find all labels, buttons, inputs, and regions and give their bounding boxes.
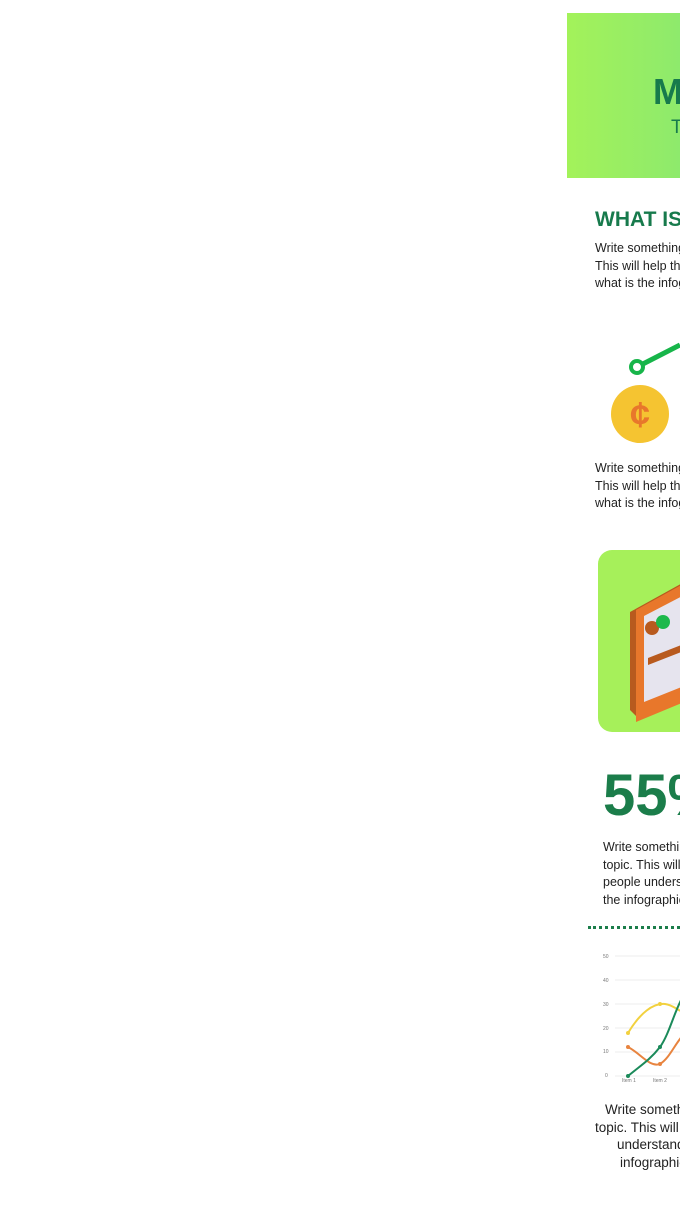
intro text (595, 241, 680, 290)
line chart: 50 (603, 954, 609, 960)
line chart: 10 (603, 1049, 609, 1055)
line chart: 40 (603, 978, 609, 984)
stat text (603, 840, 680, 906)
header banner (567, 13, 680, 178)
line chart: 30 (603, 1002, 609, 1008)
icon: coin with chart line (611, 342, 680, 443)
chart caption (595, 1102, 680, 1170)
line chart: 0 (605, 1073, 608, 1079)
line chart: Item 1 (622, 1078, 636, 1084)
text block 2 (595, 461, 680, 510)
icon: coin with chart line: ¢ (630, 394, 650, 435)
dotted divider (588, 926, 680, 929)
panel: card illustration (598, 550, 680, 732)
line chart: 20 (603, 1026, 609, 1032)
line chart: Item 2 (653, 1078, 667, 1084)
line chart (603, 954, 680, 1084)
